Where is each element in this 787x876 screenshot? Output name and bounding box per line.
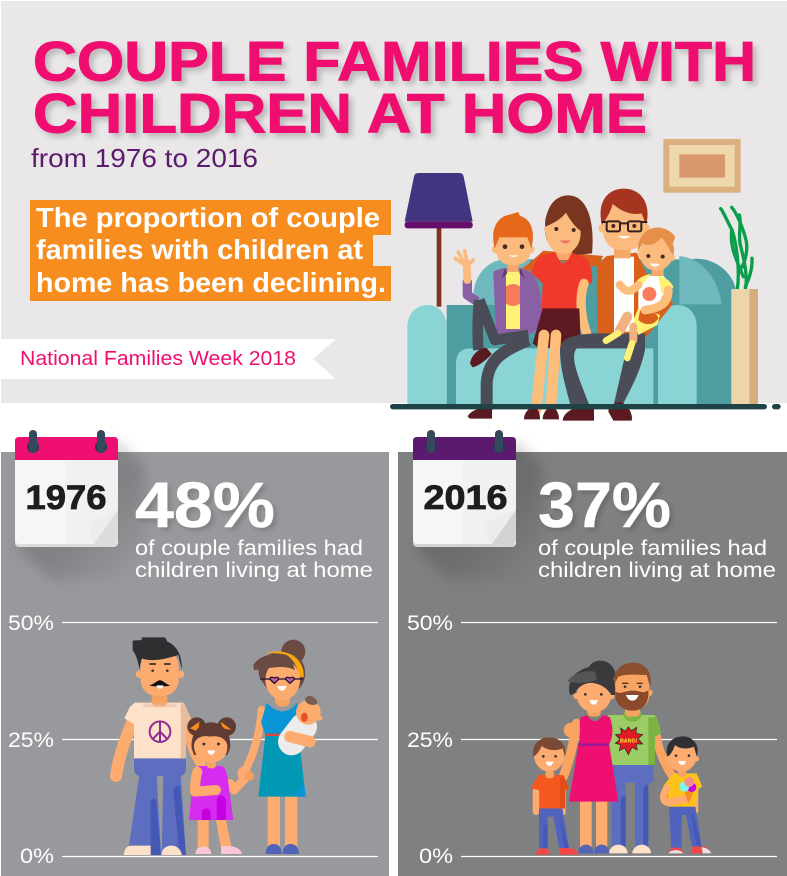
panel: 1976: [1, 430, 389, 876]
icon: picture frame: [663, 139, 741, 193]
stat description: of couple families had: [538, 537, 767, 560]
person: father: [608, 663, 672, 853]
axis: 50%: [407, 611, 453, 635]
title: [33, 30, 756, 144]
stat description: of couple families had: [135, 537, 363, 560]
stat: 48%: 48%: [135, 469, 275, 541]
person: boy in purple jacket: [455, 212, 542, 419]
illustration: 2016 family: [531, 661, 711, 855]
header background: [1, 1, 787, 403]
person: girl: [187, 717, 254, 854]
calendar: 1976: [15, 430, 118, 547]
stat description: [538, 537, 776, 582]
person: small boy on lap: [606, 227, 675, 358]
stat description: [135, 537, 373, 582]
axis: 0%: [20, 844, 54, 868]
calendar shadow: [413, 440, 543, 580]
illustration: family on sofa: [390, 139, 781, 421]
stat description: children living at home: [135, 559, 373, 582]
axis: 50%: [8, 611, 54, 635]
subtitle: from 1976 to 2016: [31, 143, 258, 173]
calendar: 1976: 1976: [26, 479, 106, 517]
icon: plant and pot: [721, 207, 758, 404]
title: COUPLE FAMILIES WITH: [33, 30, 756, 92]
ribbon: National Families Week 2018: National Families Week 2018: [20, 348, 296, 370]
person: man with glasses and orange jacket: [560, 189, 673, 421]
person: woman in red top: [522, 195, 603, 419]
calendar: 2016: [413, 430, 516, 547]
callout: declining proportion: The proportion of couple: [36, 202, 380, 233]
axis: [8, 611, 378, 868]
icon: BANG! burst: [615, 727, 643, 755]
person: baby in mother's arm: [290, 696, 322, 742]
calendar: 2016: 2016: [424, 479, 508, 517]
panel: 2016: [398, 430, 787, 876]
title: CHILDREN AT HOME: [33, 82, 647, 144]
icon: ice cream: [679, 777, 696, 804]
callout: declining proportion: [30, 200, 391, 301]
axis: 25%: [8, 728, 54, 752]
icon: BANG! burst: BANG!: [620, 739, 637, 745]
callout: declining proportion: families with children at: [36, 234, 363, 265]
person: boy in orange shirt: [531, 737, 578, 855]
person: boy with ice cream: [663, 736, 711, 853]
callout: declining proportion: home has been declining.: [36, 267, 386, 298]
icon: floor lamp: [405, 173, 473, 307]
person: father: [116, 637, 202, 855]
icon: peace symbol: [150, 721, 170, 742]
stat description: children living at home: [538, 559, 776, 582]
axis: 25%: [407, 728, 453, 752]
floor line: [390, 404, 781, 409]
illustration: 1976 family: [116, 637, 322, 855]
stat: 37%: 37%: [538, 469, 671, 541]
calendar shadow: [15, 440, 145, 580]
axis: 0%: [419, 844, 453, 868]
ribbon: National Families Week 2018: [0, 339, 336, 379]
axis: [407, 611, 777, 868]
sofa: [407, 256, 737, 404]
person: mother: [243, 640, 306, 854]
person: mother: [563, 661, 618, 853]
